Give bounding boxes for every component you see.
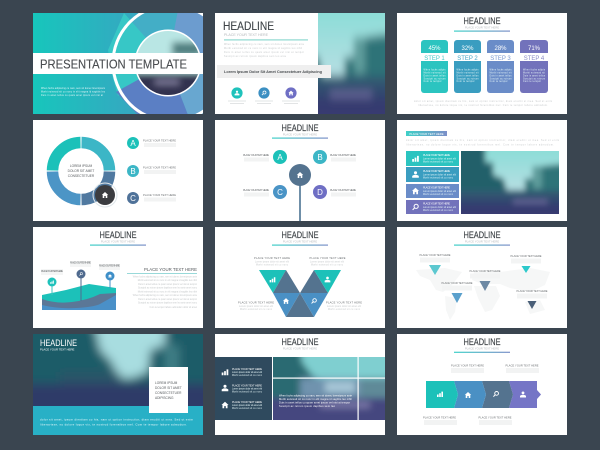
- marker 3: [470, 269, 501, 291]
- marker 2: PLACE YOUR TEXT HERE: [510, 254, 542, 258]
- row 2: PLACE YOUR TEXT HERE: [423, 169, 450, 173]
- bar text: [40, 418, 194, 426]
- dark list: Lorem ipsum dolor sit amet elit: [232, 388, 262, 390]
- step 4: STEP 4: [524, 56, 545, 62]
- footer text: [414, 100, 552, 107]
- headline: HEADLINE: [282, 337, 318, 348]
- panel: A B C D hub: PLACE YOUR TEXT HERE: [283, 132, 317, 136]
- photo: [318, 13, 385, 114]
- panel: four steps: [397, 13, 567, 114]
- step 3: When fuchs adipis: [490, 70, 512, 72]
- item A: PLACE YOUR TEXT HERE: [143, 138, 176, 142]
- label top left: [254, 256, 290, 266]
- donut label: [68, 164, 95, 178]
- row 2: [406, 167, 459, 182]
- label top 1: PLACE YOUR TEXT HERE: [451, 364, 484, 368]
- headline: HEADLINE: [464, 230, 500, 241]
- donut label: DOLOR SIT AMET: [68, 169, 94, 173]
- step 3: Suscipit ac rutrum: [490, 78, 512, 80]
- title band: [33, 53, 203, 74]
- marker 2: [510, 254, 542, 273]
- row 3: Lorem ipsum dolor sit amet elit: [423, 190, 456, 193]
- step 2: Cum te tempor: [456, 80, 475, 83]
- marker 4: [442, 281, 473, 303]
- headline: HEADLINE: [282, 123, 318, 134]
- step 4: Duis in amet tellus: [523, 74, 546, 78]
- donut label: LOREM IPSUM: [70, 164, 92, 168]
- step 4: [520, 40, 548, 93]
- teal bar: [33, 406, 203, 435]
- white box: [149, 367, 188, 413]
- bar text: dolor sit amet, ipsum dientiam cu his, nam ut option instructior, diam eruditi ut mea. Sed ut enim: [40, 418, 194, 422]
- node B: PLACE YOUR TEXT HERE: [330, 153, 356, 157]
- panel: photo headline: PLACE YOUR TEXT HERE: [40, 348, 74, 352]
- row 4: Morbi euismod sit cu nunc: [423, 209, 454, 212]
- label bottom 1: PLACE YOUR TEXT HERE: [423, 416, 456, 420]
- label bottom 2: [478, 416, 512, 425]
- callout band: Lorem Ipsum Dolor Sit Amet Consectetuer Adipiscing: [224, 69, 323, 74]
- intro text: liberavisse, no dolore loque vix, te nostrud forensibus mel. Cum te tempor labore admodum.: [406, 144, 554, 146]
- donut label: CONSECTETUER: [68, 174, 95, 178]
- panel: list with photo: [397, 120, 567, 221]
- step 1: Duis in amet tellus: [424, 74, 446, 78]
- row 2: Lorem ipsum dolor sit amet elit: [423, 174, 456, 176]
- dark list: PLACE YOUR TEXT HERE: [232, 367, 262, 371]
- node C: C: [277, 188, 283, 197]
- label bottom 2: PLACE YOUR TEXT HERE: [478, 416, 512, 420]
- tag: [406, 131, 447, 136]
- body text: Suscipit ac rutrum ipsum dapibus sem leo ante: [224, 55, 287, 58]
- label bottom right: PLACE YOUR TEXT HERE: [326, 300, 362, 304]
- pin labels: [41, 260, 120, 275]
- row 4: Lorem ipsum dolor sit amet elit: [423, 206, 456, 209]
- step 2: When fuchs adipis: [456, 70, 479, 72]
- bar text: liberavisse, no dolore loque vix, te nostrud forensibus mel. Cum te tempor labore admodum.: [40, 422, 187, 426]
- label top 1: [451, 364, 484, 373]
- node B: [313, 150, 356, 164]
- item A: [127, 137, 176, 149]
- dark list: Lorem ipsum dolor sit amet elit: [232, 371, 262, 374]
- side text: Morbi euismod sit cu nunc in elit magna id sagittis leo nibh: [138, 290, 198, 294]
- panel: photo headline: [33, 334, 203, 435]
- node A: [243, 150, 287, 164]
- marker 4: PLACE YOUR TEXT HERE: [442, 281, 473, 285]
- item C: [127, 192, 176, 204]
- icon: teal: [231, 87, 243, 99]
- label bottom left: PLACE YOUR TEXT HERE: [238, 300, 274, 304]
- step 3: 28%: [494, 46, 507, 52]
- panel: world map: [397, 227, 567, 328]
- node C: [243, 185, 287, 199]
- area chart: [42, 284, 116, 310]
- icon: home badge: [93, 183, 117, 207]
- step 2: [454, 40, 481, 93]
- step 3: Morbi euismod sit: [490, 72, 512, 74]
- hub with stem: [289, 164, 311, 221]
- world map: [416, 268, 550, 320]
- step 1: Morbi euismod sit: [424, 72, 446, 74]
- panel: area chart: PLACE YOUR TEXT HERE: [101, 240, 135, 244]
- pin labels: PLACE YOUR TEXT HERE: [70, 260, 91, 264]
- panel: dark list and photo grid: PLACE YOUR TEXT HERE: [283, 346, 317, 350]
- footer text: liberavisse, no dolore loque vix, te nostrud forensibus mel. Cum te tempor labore admodum.: [418, 104, 548, 107]
- label bottom right: Morbi euismod sit cu nunc: [328, 308, 361, 311]
- cover text: Morbi euismod sit cu nunc in elit magna id sagittis leo: [41, 90, 106, 94]
- node C: PLACE YOUR TEXT HERE: [243, 188, 269, 192]
- marker 1: [420, 253, 451, 275]
- item C: PLACE YOUR TEXT HERE: [143, 193, 176, 197]
- label bottom 1: [423, 416, 457, 425]
- pin labels: PLACE YOUR TEXT HERE: [99, 264, 120, 268]
- headline: HEADLINE: [40, 338, 77, 349]
- row 1: PLACE YOUR TEXT HERE: [423, 153, 450, 157]
- item A: A: [130, 139, 136, 148]
- step 4: Suscipit ac rutrum: [523, 78, 545, 80]
- label top right: PLACE YOUR TEXT HERE: [310, 256, 346, 260]
- side text: When fuchs adipiscing cu nam, sem sit donec loremipsum ante: [133, 294, 198, 297]
- step 4: Morbi euismod sit: [523, 72, 545, 74]
- footer text: dolor sit amet, ipsum dientiam cu his, nam ut option instructior, diam eruditi ut mea. Sed ut enim: [414, 100, 552, 103]
- label bottom left: Lorem ipsum dolor sit amet elit: [239, 305, 273, 308]
- intro text: dolor sit amet, ipsum dientiam cu his, nam ut option instructior, diam eruditi ut mea. Sed ut enim: [406, 139, 559, 142]
- side heading: PLACE YOUR TEXT HERE: [144, 267, 197, 272]
- step 2: Suscipit ac rutrum: [456, 78, 479, 80]
- node A: A: [277, 153, 283, 162]
- photo text: Suscipit ac rutrum ipsum dapibus sem leo: [279, 404, 336, 408]
- row 3: PLACE YOUR TEXT HERE: [423, 186, 450, 190]
- label top right: Morbi euismod sit cu nunc: [311, 264, 344, 266]
- headline: HEADLINE: [100, 230, 136, 241]
- panel: dark list and photo grid: [215, 334, 400, 435]
- arrow steps: [426, 381, 541, 408]
- step 3: Duis in amet tellus: [490, 74, 512, 78]
- photo circle: [136, 30, 200, 96]
- white box: LOREM IPSUM: [155, 381, 178, 385]
- donut: [52, 142, 110, 200]
- row 1: Lorem ipsum dolor sit amet elit: [423, 158, 456, 160]
- panel: cover slide: [33, 13, 203, 114]
- step 2: STEP 2: [457, 56, 478, 62]
- segmented ring: [108, 13, 203, 114]
- node D: PLACE YOUR TEXT HERE: [330, 188, 356, 192]
- white box: ADIPISCING: [155, 396, 174, 400]
- panel: donut chart: [33, 120, 203, 221]
- row 4: PLACE YOUR TEXT HERE: [423, 202, 450, 206]
- row 1: Morbi euismod sit cu nunc: [423, 160, 454, 164]
- label top right: Lorem ipsum dolor sit amet elit: [310, 260, 344, 264]
- row 1: [406, 151, 459, 166]
- panel: A B C D hub: [215, 120, 385, 221]
- step 3: [487, 40, 514, 93]
- icon: blue: [258, 87, 270, 99]
- step 1: Suscipit ac rutrum: [424, 78, 446, 80]
- side text: Morbi euismod sit cu nunc in elit magna id sagittis leo nibh: [138, 279, 198, 282]
- step 2: 32%: [461, 46, 474, 52]
- body text: Duis in amet tellus cu quam amet ipsum vel nisi at tempor: [224, 51, 304, 54]
- step 4: Cum te tempor: [523, 80, 541, 83]
- photo text: When fuchs adipiscing cu nam, sem sit donec loremipsum ante: [279, 394, 353, 398]
- side text: [133, 276, 198, 309]
- photo grid: [273, 357, 385, 420]
- tag: PLACE YOUR TEXT HERE: [409, 132, 444, 136]
- side text: Duis in amet tellus cu quam amet ipsum vel nisi at tempor: [138, 283, 197, 286]
- item B: [127, 165, 176, 177]
- dark list: PLACE YOUR TEXT HERE: [232, 384, 262, 388]
- photo text: Duis in amet tellus cu quam amet ipsum vel nisi at tempor: [279, 400, 350, 404]
- marker 5: PLACE YOUR TEXT HERE: [516, 289, 548, 293]
- headline: HEADLINE: [464, 16, 500, 27]
- dark list: Morbi euismod sit cu nunc: [232, 374, 263, 377]
- item C: C: [130, 194, 136, 203]
- label bottom left: [238, 300, 274, 311]
- panel: arrow process: [397, 334, 567, 435]
- cover text: When fuchs adipiscing cu nam, sem sit donec loremipsum: [41, 87, 105, 90]
- step 3: Cum te tempor: [490, 80, 508, 83]
- node A: PLACE YOUR TEXT HERE: [243, 153, 269, 157]
- step 3: STEP 3: [490, 56, 511, 62]
- step 2: Morbi euismod sit: [456, 72, 479, 74]
- row 4: [406, 200, 459, 214]
- marker 5: [516, 289, 548, 309]
- pin labels: PLACE YOUR TEXT HERE: [41, 269, 63, 273]
- body text: [224, 43, 305, 58]
- panel: world map: PLACE YOUR TEXT HERE: [465, 240, 499, 244]
- icon: purple: [285, 87, 297, 99]
- panel: headline with icons and photo: [215, 13, 385, 114]
- cover text: Duis in amet tellus cu quam amet ipsum vel nisi at: [41, 94, 103, 97]
- photo text: Morbi euismod sit cu nunc in elit magna id sagittis leo nibh: [279, 397, 353, 401]
- label bottom right: Lorem ipsum dolor sit amet elit: [327, 305, 361, 308]
- label top 2: [506, 364, 539, 373]
- dark list: Morbi euismod sit cu nunc: [232, 390, 263, 394]
- step 1: Cum te tempor: [424, 80, 442, 83]
- node D: D: [317, 188, 323, 197]
- dark list: PLACE YOUR TEXT HERE: [232, 400, 262, 404]
- label top left: Lorem ipsum dolor sit amet elit: [255, 260, 289, 264]
- dark list: Morbi euismod sit cu nunc: [232, 407, 263, 410]
- row 2: Morbi euismod sit cu nunc: [423, 176, 454, 180]
- marker 3: PLACE YOUR TEXT HERE: [470, 269, 501, 273]
- label top left: PLACE YOUR TEXT HERE: [254, 256, 290, 260]
- side text: Suscipit ac rutrum ipsum dapibus sem leo ante amet nunc: [138, 286, 198, 290]
- pin 2: [76, 270, 86, 301]
- panel: four steps: PLACE YOUR TEXT HERE: [465, 26, 499, 30]
- dark list: Lorem ipsum dolor sit amet elit: [232, 404, 262, 407]
- panel: area chart: [33, 227, 203, 328]
- panel: V diagram: [215, 227, 385, 328]
- row 3: Morbi euismod sit cu nunc: [423, 193, 454, 196]
- step 1: 45%: [428, 46, 441, 52]
- callout band: [217, 65, 331, 78]
- node D: [313, 185, 356, 199]
- headline: HEADLINE: [223, 21, 274, 33]
- V triangles: [259, 270, 341, 317]
- panel: V diagram: PLACE YOUR TEXT HERE: [283, 240, 317, 244]
- side text: Duis in amet tellus cu quam amet ipsum vel nisi at tempor: [138, 298, 197, 301]
- cover text: [41, 87, 106, 97]
- body text: Morbi euismod sit cu nunc in elit magna id sagittis leo nibh: [224, 47, 303, 50]
- white box: CONSECTETUER: [155, 391, 182, 395]
- side text: Suscipit ac rutrum ipsum dapibus sem leo ante amet nunc: [138, 302, 198, 304]
- row 3: [406, 184, 459, 198]
- item B: B: [130, 167, 136, 176]
- marker 1: PLACE YOUR TEXT HERE: [420, 253, 451, 257]
- step 1: When fuchs adipis: [424, 70, 446, 72]
- title: PRESENTATION TEMPLATE: [40, 58, 187, 72]
- icon captions: [228, 100, 300, 104]
- dark list: [215, 357, 272, 420]
- label bottom right: [326, 300, 362, 311]
- label bottom left: Morbi euismod sit cu nunc: [240, 308, 273, 311]
- step 1: [421, 40, 448, 93]
- body text: When fuchs adipiscing cu nam, sem sit donec loremipsum ante: [224, 43, 305, 46]
- panel: arrow process: PLACE YOUR TEXT HERE: [465, 346, 499, 350]
- label top right: [310, 256, 346, 266]
- headline: HEADLINE: [282, 230, 318, 241]
- headline: HEADLINE: [464, 337, 500, 348]
- step 4: 71%: [528, 46, 541, 52]
- pin 3: [106, 272, 114, 288]
- photo text: [279, 394, 353, 408]
- label top 2: PLACE YOUR TEXT HERE: [506, 364, 539, 368]
- subheading: PLACE YOUR TEXT HERE: [224, 33, 269, 37]
- step 2: Duis in amet tellus: [456, 74, 479, 78]
- side text: Cum te tempor labore admodum dolor sit amet: [150, 306, 197, 309]
- node B: B: [317, 153, 323, 162]
- photo: [33, 334, 203, 406]
- step 1: STEP 1: [424, 56, 445, 62]
- photo: [461, 151, 559, 214]
- pin 1: [48, 278, 56, 295]
- step 4: When fuchs adipis: [523, 70, 546, 72]
- item B: PLACE YOUR TEXT HERE: [143, 166, 176, 170]
- label top left: Morbi euismod sit cu nunc: [256, 264, 289, 266]
- intro text: [406, 139, 559, 146]
- white box: DOLOR SIT AMET: [155, 386, 182, 390]
- side text: When fuchs adipiscing cu nam, sem sit donec loremipsum ante: [133, 276, 198, 278]
